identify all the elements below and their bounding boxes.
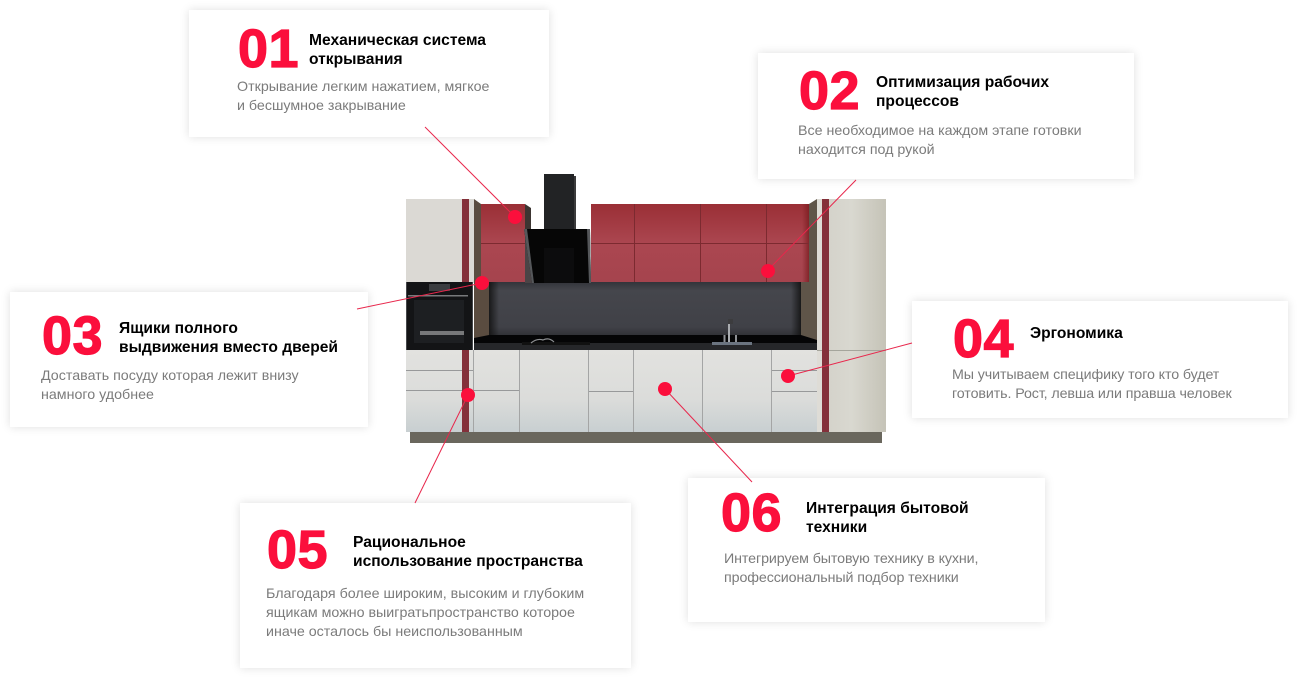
description 02: находится под рукой <box>798 142 935 158</box>
number 06: 06 <box>721 483 782 543</box>
oven <box>406 282 473 350</box>
heading 02: процессов <box>876 93 959 110</box>
heading 01: Механическая система <box>309 32 486 49</box>
heading 05 <box>353 534 583 570</box>
right upper cabinets <box>591 204 810 282</box>
card 06 <box>688 478 1045 622</box>
description 06: профессиональный подбор техники <box>724 570 959 586</box>
callout 02 <box>761 180 856 278</box>
heading 03 <box>119 320 338 356</box>
base cabinets <box>406 350 817 432</box>
description 03 <box>41 368 299 403</box>
number 05: 05 <box>267 520 328 580</box>
callout 04 <box>781 343 912 383</box>
description 02: Все необходимое на каждом этапе готовки <box>798 123 1082 139</box>
description 01: Открывание легким нажатием, мягкое <box>237 79 489 95</box>
description 06: Интегрируем бытовую технику в кухни, <box>724 551 978 567</box>
number 03: 03 <box>42 306 103 366</box>
description 06 <box>724 551 978 586</box>
right tall cabinet <box>817 199 886 432</box>
heading 05: использование пространства <box>353 553 583 570</box>
left wood side panel <box>474 199 489 338</box>
heading 05: Рациональное <box>353 534 466 551</box>
description 05: иначе осталось бы неиспользованным <box>266 624 523 640</box>
heading 02 <box>876 74 1049 110</box>
plinth <box>410 432 882 443</box>
callout 03 <box>357 276 489 309</box>
sink and faucet <box>712 319 752 345</box>
heading 06: техники <box>806 519 867 536</box>
heading 03: выдвижения вместо дверей <box>119 339 338 356</box>
callout 01 <box>425 127 522 224</box>
heading 02: Оптимизация рабочих <box>876 74 1049 91</box>
card 05 <box>240 503 631 668</box>
heading 04: Эргономика <box>1030 325 1123 342</box>
number 04: 04 <box>953 309 1014 369</box>
description 05: ящикам можно выигратьпространство которое <box>266 605 575 621</box>
card 03 <box>10 292 368 427</box>
description 03: намного удобнее <box>41 387 154 403</box>
card 02 <box>758 53 1134 179</box>
left tall cabinet <box>406 199 474 283</box>
red decorative strips <box>462 199 829 432</box>
right wood side panel <box>801 199 817 342</box>
hob <box>522 339 590 345</box>
description 04: Мы учитываем специфику того кто будет <box>952 367 1219 383</box>
heading 06: Интеграция бытовой <box>806 500 969 517</box>
heading 01: открывания <box>309 51 403 68</box>
countertop <box>474 335 817 350</box>
card 04 <box>912 301 1288 418</box>
callout 06 <box>658 382 752 482</box>
number 02: 02 <box>799 61 860 121</box>
description 01 <box>237 79 489 114</box>
callout 05 <box>415 388 475 503</box>
heading 03: Ящики полного <box>119 320 238 337</box>
cooker hood <box>524 174 591 283</box>
left upper cabinet <box>481 204 533 283</box>
description 04 <box>952 367 1232 402</box>
description 05: Благодаря более широким, высоким и глубоким <box>266 586 584 602</box>
heading 01 <box>309 32 486 68</box>
heading 06 <box>806 500 969 536</box>
description 01: и бесшумное закрывание <box>237 98 406 114</box>
description 03: Доставать посуду которая лежит внизу <box>41 368 299 384</box>
number 01: 01 <box>238 19 299 79</box>
description 04: готовить. Рост, левша или правша человек <box>952 386 1232 402</box>
description 02 <box>798 123 1082 158</box>
card 01 <box>189 10 549 137</box>
backsplash <box>489 282 801 338</box>
description 05 <box>266 586 584 640</box>
